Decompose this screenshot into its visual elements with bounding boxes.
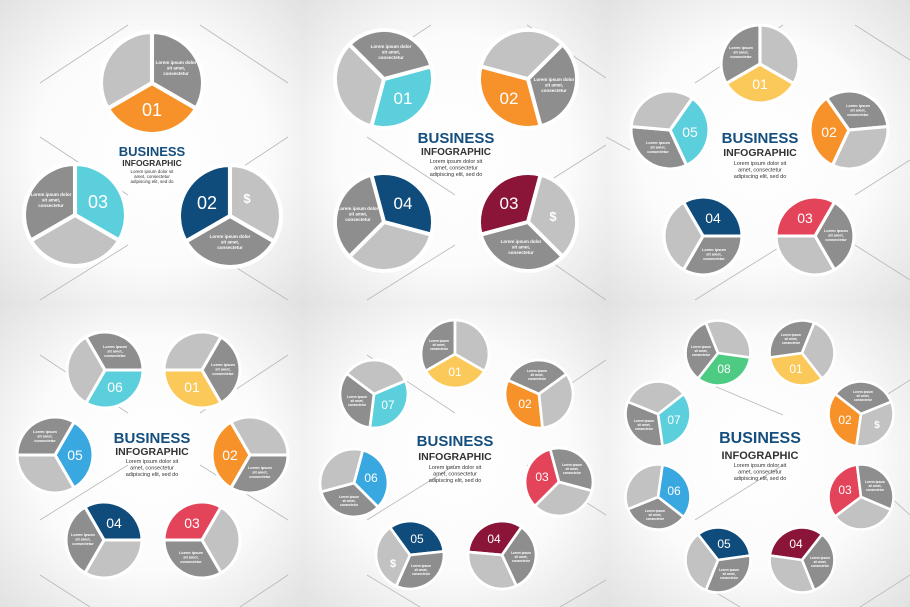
circle 02 orange: 02 xyxy=(821,124,837,140)
circle 06 cyan: consectetur xyxy=(104,354,126,358)
circle 04 navy xyxy=(52,488,156,592)
circle 02 orange xyxy=(807,88,891,172)
circle 04 maroon: consectetur xyxy=(512,559,531,563)
circle 05 blue: sit amet, xyxy=(37,434,53,438)
circle 05 navy: 05 xyxy=(717,537,731,551)
circle 02 navy: sit amet, xyxy=(221,240,239,244)
circle 07 cyan: 07 xyxy=(667,413,681,427)
circle 04 maroon: 04 xyxy=(487,532,501,546)
circle 03 cyan: sit amet, xyxy=(42,198,60,202)
circle 02 orange: consectetur xyxy=(854,398,873,402)
circle 05 blue: Lorem ipsum xyxy=(33,430,58,434)
circle 06 cyan xyxy=(53,318,157,422)
circle 04 maroon xyxy=(760,518,844,602)
title panel 6: Lorem ipsum dolor sit xyxy=(734,463,787,469)
circle 03 red xyxy=(818,454,904,540)
circle 03 red: 03 xyxy=(184,515,200,531)
circle 01 orange: 01 xyxy=(142,100,162,120)
circle 03 maroon: 03 xyxy=(500,194,518,213)
circle 03 red: Lorem ipsum xyxy=(179,551,204,555)
title panel 2: INFOGRAPHIC xyxy=(421,147,491,158)
title panel 6: amet, consectetur xyxy=(738,470,782,476)
circle 04 maroon: consectetur xyxy=(811,564,830,568)
title panel 3: INFOGRAPHIC xyxy=(723,147,797,159)
circle 01 yellow: 01 xyxy=(752,76,768,92)
circle 01 yellow xyxy=(760,311,844,395)
circle 06 blue: sit amet, xyxy=(343,499,356,503)
title panel 6: adipiscing elit, sed do xyxy=(734,476,786,482)
circle 04 navy: sit amet, xyxy=(706,252,722,256)
circle 04 navy: consectetur xyxy=(72,542,94,546)
circle 03 red: consectetur xyxy=(563,471,582,475)
circle 03 maroon xyxy=(459,153,597,291)
title panel 5: INFOGRAPHIC xyxy=(418,451,492,463)
circle 01 cyan: Lorem ipsum dolor xyxy=(371,44,412,49)
circle 03 red: Lorem ipsum xyxy=(865,480,885,484)
circle 02 navy: Lorem ipsum dolor xyxy=(210,234,251,239)
circle 03 red: consectetur xyxy=(866,488,885,492)
title panel 4: Lorem ipsum dolor sit xyxy=(126,459,179,465)
circle 02 orange: 02 xyxy=(500,89,518,108)
circle 01 yellow: 01 xyxy=(789,362,803,376)
title panel 3: BUSINESS xyxy=(722,130,798,147)
circle 05 blue xyxy=(17,417,93,493)
circle 04 navy: Lorem ipsum xyxy=(71,533,96,537)
title panel 3 xyxy=(722,130,798,180)
circle 02 orange: sit amet, xyxy=(252,470,268,474)
circle 08 green: consectetur xyxy=(692,353,711,357)
circle 01 orange xyxy=(101,32,203,134)
circle 05 navy xyxy=(676,518,760,602)
title panel 5: Lorem ipsum dolor sit xyxy=(429,465,482,471)
circle 01 yellow: sit amet, xyxy=(785,337,798,341)
circle 05 cyan: 05 xyxy=(682,124,698,140)
circle 04 navy xyxy=(315,153,453,291)
circle 03 red: sit amet, xyxy=(183,556,199,560)
circle 05 navy: Lorem ipsum xyxy=(719,568,739,572)
circle 03 red: 03 xyxy=(838,483,852,497)
circle 01 orange: consectetur xyxy=(163,71,189,76)
circle 05 blue: consectetur xyxy=(34,439,56,443)
circle 03 red: sit amet, xyxy=(566,467,579,471)
circle 07 cyan xyxy=(616,372,700,456)
panel 6: eight circles xyxy=(616,311,904,602)
circle 05 navy: Lorem ipsum xyxy=(411,564,431,568)
circle 05 blue: 05 xyxy=(67,447,83,463)
circle 06 blue: consectetur xyxy=(340,503,359,507)
circle 04 navy: consectetur xyxy=(345,217,371,222)
circle 02 orange: Lorem ipsum xyxy=(527,369,547,373)
circle 01 yellow: sit amet, xyxy=(733,50,749,54)
circle 03 red: Lorem ipsum xyxy=(562,463,582,467)
circle 07 cyan: Lorem ipsum xyxy=(634,419,654,423)
title panel 2: adipiscing elit, sed do xyxy=(430,172,482,178)
title panel 3: adipiscing elit, sed do xyxy=(734,174,786,180)
title panel 5 xyxy=(417,433,493,484)
circle 03 red: 03 xyxy=(535,470,549,484)
circle 03 red: sit amet, xyxy=(828,234,844,238)
circle 04 navy: 04 xyxy=(394,194,412,213)
circle 06 blue: sit amet, xyxy=(649,513,662,517)
circle 07 cyan xyxy=(326,346,422,442)
circle 07 cyan: consectetur xyxy=(635,427,654,431)
panel 4: six circles xyxy=(17,318,288,592)
circle 04 navy: sit amet, xyxy=(349,212,367,216)
circle 02 orange: consectetur xyxy=(541,88,567,93)
title panel 4: BUSINESS xyxy=(114,430,190,447)
circle 02 orange: Lorem ipsum xyxy=(248,466,273,470)
circle 03 red: sit amet, xyxy=(869,484,882,488)
circle 04 maroon: sit amet, xyxy=(814,560,827,564)
title panel 2: BUSINESS xyxy=(418,130,494,147)
circle 04 navy: 04 xyxy=(106,515,122,531)
circle 01 yellow xyxy=(721,25,799,103)
circle 07 cyan: Lorem ipsum xyxy=(347,395,367,399)
circle 04 navy: Lorem ipsum dolor xyxy=(338,206,379,211)
circle 06 blue: Lorem ipsum xyxy=(645,509,665,513)
circle 01 yellow: Lorem ipsum xyxy=(429,339,449,343)
circle 07 cyan: sit amet, xyxy=(638,423,651,427)
circle 01 orange: sit amet, xyxy=(167,66,185,70)
circle 02 orange: sit amet, xyxy=(850,108,866,112)
circle 02 orange: $ xyxy=(874,420,880,431)
circle 03 cyan: consectetur xyxy=(38,203,64,208)
circle 03 red: consectetur xyxy=(825,238,847,242)
circle 02 orange: sit amet, xyxy=(545,82,563,88)
circle 05 cyan: Lorem ipsum xyxy=(646,141,671,145)
circle 05 cyan: consectetur xyxy=(647,150,669,154)
title panel 3: amet, consectetur xyxy=(738,168,782,174)
circle 06 blue: consectetur xyxy=(646,517,665,521)
circle 03 maroon: sit amet, xyxy=(512,244,530,250)
title panel 4 xyxy=(114,430,190,478)
title panel 2: Lorem ipsum dolor sit xyxy=(430,159,483,165)
circle 05 navy: consectetur xyxy=(720,576,739,580)
circle 07 cyan: sit amet, xyxy=(351,399,364,403)
circle 01 yellow: consectetur xyxy=(730,55,752,59)
circle 07 cyan: consectetur xyxy=(348,403,367,407)
circle 02 orange xyxy=(492,347,586,441)
circle 01 cyan: sit amet, xyxy=(382,50,400,54)
title panel 4: INFOGRAPHIC xyxy=(115,446,189,458)
circle 04 maroon: Lorem ipsum xyxy=(810,556,830,560)
title panel 6 xyxy=(719,430,801,482)
title panel 1: INFOGRAPHIC xyxy=(122,158,182,168)
title panel 1: amet, consectetur xyxy=(134,174,170,179)
circle 06 cyan: 06 xyxy=(107,379,123,395)
circle 02 orange: consectetur xyxy=(249,475,271,479)
circle 06 blue xyxy=(312,441,396,525)
title panel 6: BUSINESS xyxy=(719,430,801,447)
circle 01 cyan: 01 xyxy=(394,89,412,108)
circle 03 red xyxy=(762,183,868,289)
circle 02 orange: Lorem ipsum xyxy=(846,104,871,108)
circle 02 orange xyxy=(212,417,288,493)
circle 06 blue: Lorem ipsum xyxy=(339,495,359,499)
circle 05 navy: consectetur xyxy=(412,572,431,576)
circle 08 green xyxy=(676,311,760,395)
circle 02 orange: 02 xyxy=(838,413,852,427)
circle 07 cyan: 07 xyxy=(381,398,395,412)
title panel 3: Lorem ipsum dolor sit xyxy=(734,161,787,167)
circle 04 navy: consectetur xyxy=(703,257,725,261)
circle 02 navy xyxy=(160,146,300,286)
circle 02 navy: 02 xyxy=(197,193,217,213)
circle 06 blue xyxy=(616,455,700,539)
circle 01 yellow: consectetur xyxy=(782,341,801,345)
title panel 1 xyxy=(119,144,186,184)
circle 05 navy: $ xyxy=(390,558,396,570)
circle 01 orange: Lorem ipsum dolor xyxy=(156,60,197,65)
circle 01 cyan: consectetur xyxy=(378,55,404,60)
circle 01 yellow: Lorem ipsum xyxy=(211,363,236,367)
title panel 5: amet, consectetur xyxy=(433,472,477,478)
circle 05 cyan xyxy=(628,88,712,172)
circle 03 maroon: Lorem ipsum dolor xyxy=(501,239,542,244)
panel 1: three circles xyxy=(5,32,300,286)
circle 06 blue: 06 xyxy=(667,484,681,498)
circle 01 yellow xyxy=(150,318,254,422)
circle 03 maroon: consectetur xyxy=(508,250,534,255)
title panel 4: adipiscing elit, sed do xyxy=(126,472,178,478)
circle 05 navy xyxy=(365,510,455,600)
circle 03 red: consectetur xyxy=(180,560,202,564)
panel 5: seven circles xyxy=(312,320,601,600)
title panel 6: INFOGRAPHIC xyxy=(722,450,799,462)
circle 03 maroon: $ xyxy=(549,209,557,224)
circle 02 orange: sit amet, xyxy=(857,394,870,398)
circle 01 cyan xyxy=(315,10,453,148)
circle 04 maroon: 04 xyxy=(789,537,803,551)
title panel 1: BUSINESS xyxy=(119,144,186,159)
title panel 1: Lorem ipsum dolor sit xyxy=(130,169,174,174)
panel 3: five circles xyxy=(628,25,891,289)
circle 01 yellow: sit amet, xyxy=(215,368,231,372)
circle 01 yellow: 01 xyxy=(184,379,200,395)
circle 04 navy: Lorem ipsum xyxy=(702,248,727,252)
circle 01 yellow: Lorem ipsum xyxy=(781,333,801,337)
circle 02 orange xyxy=(459,10,597,148)
circle 06 cyan: sit amet, xyxy=(107,350,123,354)
circle 08 green: Lorem ipsum xyxy=(691,345,711,349)
circle 03 red xyxy=(150,488,254,592)
circle 03 cyan: 03 xyxy=(88,192,108,212)
circle 04 maroon xyxy=(457,510,547,600)
title panel 5: adipiscing elit, sed do xyxy=(429,478,481,484)
circle 08 green: sit amet, xyxy=(695,349,708,353)
circle 01 yellow: consectetur xyxy=(430,347,449,351)
circle 05 navy: sit amet, xyxy=(415,568,428,572)
title panel 1: adipiscing elit, sed do xyxy=(130,179,174,184)
circle 02 orange: 02 xyxy=(518,397,532,411)
circle 01 yellow: sit amet, xyxy=(433,343,446,347)
circle 02 orange: Lorem ipsum xyxy=(853,390,873,394)
circle 02 orange xyxy=(819,372,903,456)
circle 03 red: Lorem ipsum xyxy=(824,229,849,233)
title panel 2 xyxy=(418,130,494,178)
circle 04 navy xyxy=(650,183,756,289)
title panel 4: amet, consectetur xyxy=(130,466,174,472)
circle 01 yellow: 01 xyxy=(448,365,462,379)
circle 02 orange: consectetur xyxy=(528,377,547,381)
circle 02 orange: 02 xyxy=(222,447,238,463)
circle 04 maroon: Lorem ipsum xyxy=(511,551,531,555)
circle 01 yellow: consectetur xyxy=(212,372,234,376)
circle 03 red xyxy=(517,440,601,524)
panel 2: four circles xyxy=(315,10,597,291)
circle 03 cyan: Lorem ipsum dolor xyxy=(31,192,72,197)
circle 02 orange: sit amet, xyxy=(531,373,544,377)
circle 05 navy: 05 xyxy=(410,532,424,546)
circle 08 green: 08 xyxy=(717,362,731,376)
circle 02 orange: Lorem ipsum dolor xyxy=(534,77,575,82)
circle 05 cyan: sit amet, xyxy=(650,146,666,150)
circle 04 navy: sit amet, xyxy=(75,538,91,542)
circle 01 yellow xyxy=(421,320,489,388)
circle 01 yellow: Lorem ipsum xyxy=(729,46,754,50)
circle 02 navy: consectetur xyxy=(217,245,243,250)
circle 03 cyan xyxy=(5,145,145,285)
title panel 5: BUSINESS xyxy=(417,433,493,450)
circle 06 blue: 06 xyxy=(364,471,378,485)
title panel 2: amet, consectetur xyxy=(434,166,478,172)
circle 04 navy: 04 xyxy=(705,210,721,226)
circle 04 maroon: sit amet, xyxy=(515,555,528,559)
circle 02 navy: $ xyxy=(243,191,251,206)
circle 03 red: 03 xyxy=(797,210,813,226)
circle 02 orange: consectetur xyxy=(847,113,869,117)
circle 05 navy: sit amet, xyxy=(723,572,736,576)
circle 06 cyan: Lorem ipsum xyxy=(103,345,128,349)
